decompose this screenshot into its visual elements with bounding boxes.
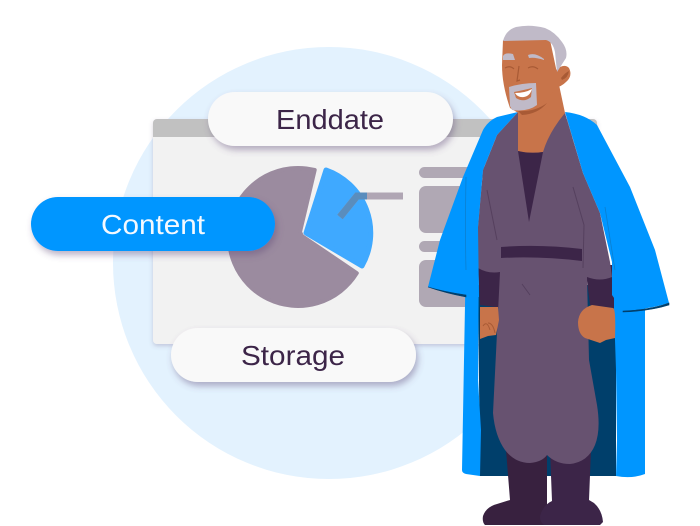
face: [502, 40, 558, 114]
pie chart: [229, 168, 403, 306]
pie slice: blue: [306, 170, 371, 266]
hair: [503, 26, 566, 72]
pill: Storage: Storage: [241, 340, 345, 371]
browser window: [153, 119, 597, 344]
left hand fingers: [483, 323, 495, 333]
belt: [501, 246, 582, 261]
boots: [483, 450, 603, 525]
pointer line: [340, 196, 403, 217]
right hand: [578, 305, 615, 343]
left hand: [480, 307, 499, 339]
background circle: [113, 47, 545, 479]
eyebrows: [503, 53, 544, 60]
robe and trousers: [478, 112, 612, 464]
jaw shadow: [518, 103, 547, 115]
beard: [509, 83, 537, 110]
robe fold lines: [487, 187, 584, 295]
beard opening: [514, 88, 532, 100]
ear: [556, 66, 570, 87]
pill: Enddate: Enddate: [276, 104, 384, 135]
inner cape lining: [478, 285, 616, 476]
legend bars: [419, 167, 499, 307]
inner shirt: [518, 151, 543, 222]
robe sleeves: [478, 265, 503, 308]
cape hem shadows: [428, 287, 669, 312]
pie slice: large grey: [229, 168, 357, 306]
pill: Storage: [171, 328, 416, 382]
neck: [518, 80, 565, 155]
eyes and nose: [505, 66, 538, 81]
cape front panels: [462, 250, 481, 476]
pill: Content: Content: [101, 209, 205, 240]
smile: [515, 89, 532, 97]
character: man in blue cape: [428, 26, 669, 525]
pill: Content: [31, 197, 275, 251]
cape shoulders: [428, 112, 518, 297]
cape fold lines: [466, 177, 615, 270]
pill: Enddate: [208, 92, 453, 146]
